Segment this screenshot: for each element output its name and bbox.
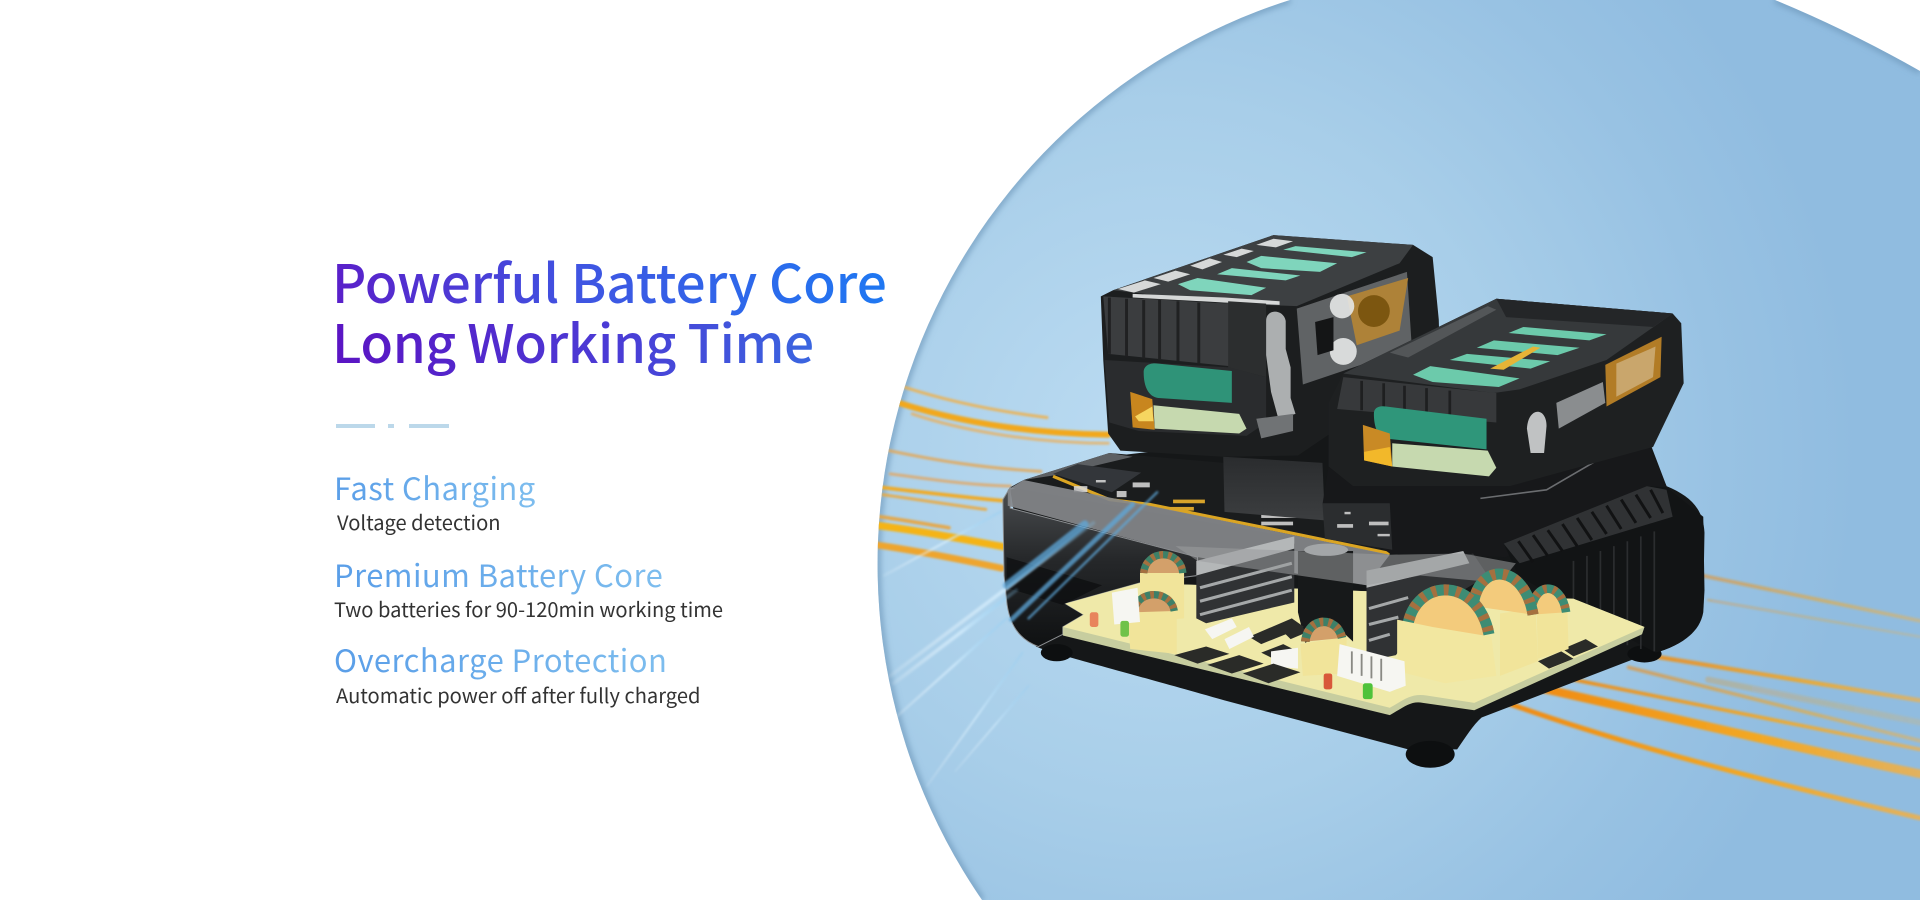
divider dashes [336, 424, 449, 428]
feature: overcharge protection [334, 636, 700, 709]
left orange heat streaks [877, 387, 1108, 568]
inductor left rear [1140, 555, 1184, 622]
feature: overcharge protection: Overcharge Protection [334, 636, 667, 681]
inductor left front [1128, 595, 1177, 654]
title [332, 243, 887, 379]
blue white light rays [884, 512, 1093, 786]
cells top [1178, 246, 1367, 295]
chips small [1249, 618, 1598, 669]
ribbed front [1103, 296, 1229, 366]
charger top deck [1010, 453, 1390, 555]
charger base [1010, 429, 1704, 768]
title: Long Working Time [332, 303, 814, 379]
large inductor [1397, 590, 1496, 683]
heatsink left [1196, 544, 1294, 623]
second inductor [1473, 574, 1538, 676]
front cell [1374, 406, 1487, 449]
title: Powerful Battery Core [332, 243, 887, 319]
right ribbed heatsink [1504, 486, 1704, 653]
feature: fast charging [334, 464, 536, 536]
blue circle background [878, 0, 1920, 900]
chips large [1174, 647, 1300, 683]
gold panel [1347, 278, 1408, 345]
lugs [1118, 239, 1293, 305]
gold panel [1605, 337, 1662, 407]
lower body [1104, 360, 1266, 436]
capacitor [1298, 551, 1353, 643]
transparent cover left [1003, 480, 1390, 647]
ribbed front [1337, 377, 1496, 422]
right orange heat streaks [1500, 576, 1920, 818]
circuit board [1063, 536, 1644, 715]
inductor centre [1300, 622, 1347, 676]
pcb strip [1153, 405, 1247, 433]
LEDs [1090, 612, 1098, 627]
pcb strip [1392, 443, 1496, 476]
feature: fast charging: Fast Charging [334, 464, 536, 509]
battery pack back left [1101, 235, 1440, 457]
blue rays inside cover [1007, 492, 1157, 620]
feet [1041, 644, 1662, 768]
feature: premium battery core [334, 551, 723, 623]
battery pack front right [1329, 299, 1684, 486]
silver strap [1527, 412, 1547, 453]
silver strap [1266, 312, 1296, 419]
third inductor [1531, 589, 1569, 659]
feature: premium battery core: Premium Battery Core [334, 551, 663, 596]
illustration: charger on blue circle [878, 0, 1920, 900]
feature: fast charging: Voltage detection [337, 507, 501, 536]
side panel [1297, 272, 1412, 384]
dock block left [1223, 457, 1325, 520]
white connectors [1112, 588, 1406, 692]
heatsink right [1367, 553, 1488, 661]
label panel [1556, 382, 1605, 429]
amber flex [1130, 392, 1155, 430]
cells top [1413, 327, 1607, 387]
transparent shell band [1176, 546, 1516, 585]
feature: overcharge protection: Automatic power off after fully charged [336, 680, 700, 709]
amber flex [1363, 425, 1392, 467]
dock block right and display [1322, 433, 1667, 557]
feature: premium battery core: Two batteries for 90-120min working time [334, 594, 723, 623]
front cell [1144, 363, 1232, 403]
